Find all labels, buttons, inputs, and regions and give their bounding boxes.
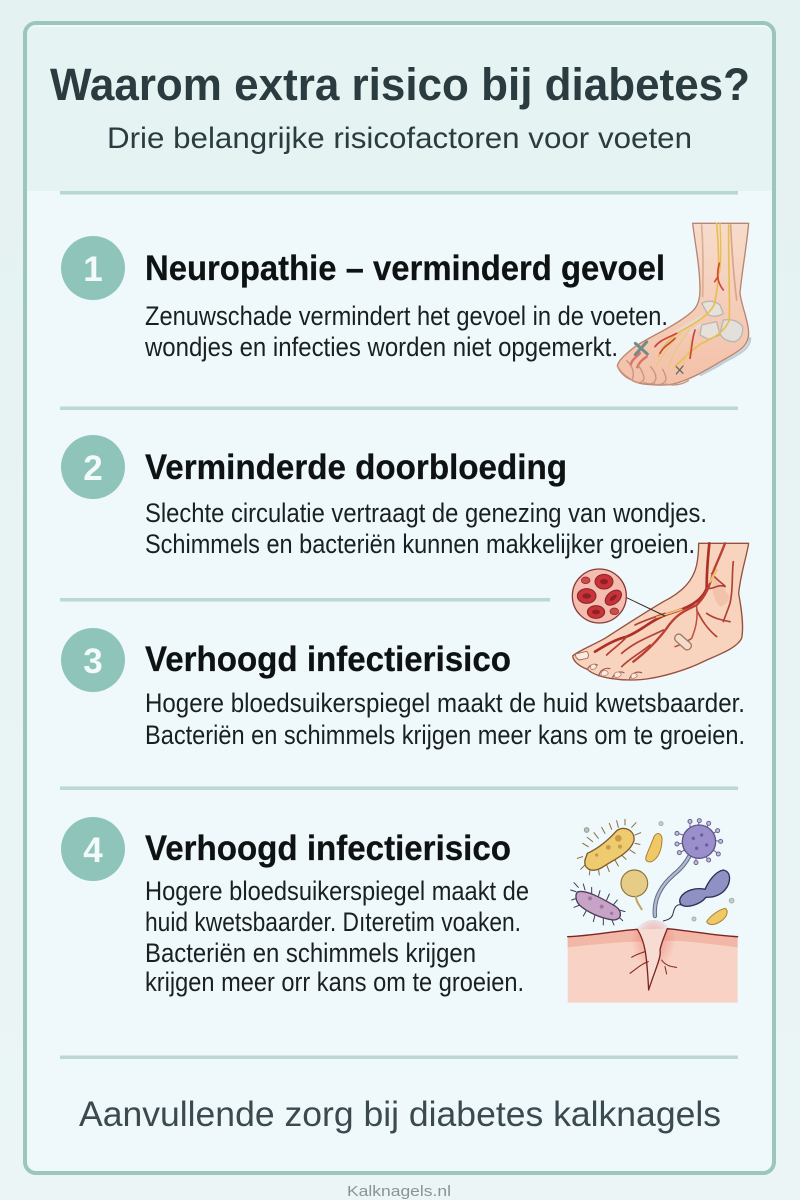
body text 1: [144, 301, 668, 362]
footer tagline: Aanvullende zorg bij diabetes kalknagels: [79, 1095, 721, 1134]
number badge 2: [61, 435, 125, 499]
heading 3: Verhoogd infectierisico: [145, 640, 511, 679]
heading 2: Verminderde doorbloeding: [145, 448, 567, 487]
heading 4: Verhoogd infectierisico: [145, 829, 511, 868]
number badge 4: [61, 817, 125, 881]
body text 2: Schimmels en bacteriën kunnen makkelijker groeien.: [145, 529, 695, 559]
risk item 3: infectierisico: [61, 628, 745, 750]
number badge 2: 2: [83, 449, 103, 488]
icon: bacteria above cracked skin: [568, 819, 738, 1003]
title: Waarom extra risico bij diabetes?: [50, 59, 750, 110]
body text 4: Bacteriën en schimmels krijgen: [145, 938, 476, 968]
number badge 1: [61, 236, 125, 300]
body text 4: huid kwetsbaarder. Dıteretim voaken.: [145, 907, 521, 937]
risk item 4: infectierisico: [61, 817, 738, 1003]
number badge 3: [61, 628, 125, 692]
body text 4: [145, 876, 529, 997]
body text 2: Slechte circulatie vertraagt de genezing van wondjes.: [145, 498, 707, 528]
risk item 2: doorbloeding: [61, 435, 749, 680]
body text 3: Hogere bloedsuikerspiegel maakt de huid kwetsbaarder.: [145, 688, 745, 718]
heading 1: Neuropathie – verminderd gevoel: [145, 249, 665, 288]
number badge 3: 3: [83, 642, 103, 681]
body text 4: Hogere bloedsuikerspiegel maakt de: [145, 876, 529, 906]
body text 4: krijgen meer orr kans om te groeien.: [145, 967, 524, 997]
number badge 4: 4: [83, 831, 103, 870]
icon: foot with blood vessels: [572, 543, 749, 680]
subtitle: Drie belangrijke risicofactoren voor voeten: [107, 122, 692, 155]
source credit: Kalknagels.nl: [347, 1183, 451, 1200]
risk item 1: neuropathie: [61, 223, 750, 385]
body text 2: [145, 498, 707, 559]
body text 1: Zenuwschade vermindert het gevoel in de voeten.: [145, 301, 668, 331]
icon: foot with nerves: [617, 223, 750, 385]
body text 3: [145, 688, 745, 750]
body text 1: wondjes en infecties worden niet opgemerkt.: [144, 332, 618, 362]
number badge 1: 1: [83, 250, 103, 289]
